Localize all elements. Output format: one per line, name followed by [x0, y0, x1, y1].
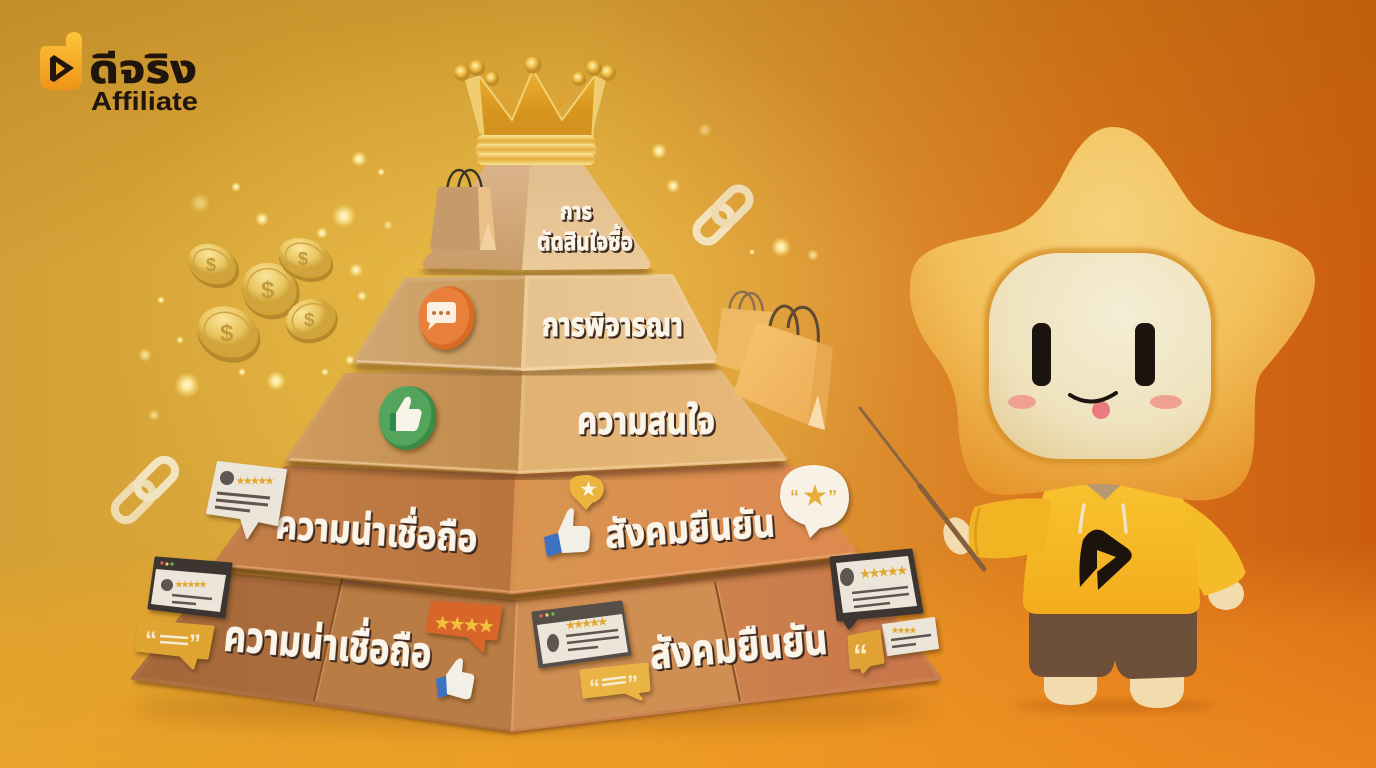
logo icon: [40, 32, 82, 90]
icon: white star speech bubble: [780, 465, 849, 538]
label: การ / ตัดสินใจซื้อ: [537, 198, 633, 256]
pyramid: [133, 163, 940, 732]
icon: yellow star bubble: [570, 475, 604, 510]
icon: gold quote bubble, tier 1 right: [849, 631, 883, 672]
icon: chain link, upper right: [692, 184, 754, 246]
legs: [1044, 665, 1184, 708]
icon: browser review card, tier 1 center: ★★★★★: [565, 617, 608, 632]
label: ความน่าเชื่อถือ (tier 2): ความน่าเชื่อถือ: [274, 497, 479, 561]
icon: gold quote bubble, tier 1 far left: ”: [189, 630, 201, 657]
pointer stick: [860, 408, 984, 569]
icon: review speech card, tier 2 left: ★★★★★: [236, 476, 274, 486]
hoodie torso: [1023, 482, 1200, 614]
icon: white star speech bubble: “: [790, 487, 799, 507]
icon: browser review card, tier 1 far left: [149, 558, 231, 617]
icon: small review card, tier 1 right: ★★★★: [891, 626, 917, 635]
label: การพิจารณา: การพิจารณา: [542, 306, 683, 343]
icon: blue thumbs-up, tier 1: [436, 658, 474, 699]
coin 1: $: [206, 255, 216, 275]
icon: browser review card, tier 1 center: [533, 602, 630, 667]
front bag: [733, 306, 833, 430]
label line 1: การ: [560, 198, 592, 224]
icon: shopping bag on top tier: [430, 170, 496, 250]
icon: gold quote bubble, tier 1 right: “: [853, 639, 868, 672]
coin 4: $: [304, 310, 315, 331]
icon: review card, tier 1 right: [831, 550, 922, 628]
star head: [910, 127, 1315, 500]
icon: blue thumbs-up, tier 2: [544, 508, 590, 557]
eyes: [1032, 323, 1155, 386]
icon: gold quote bubble, tier 1 far left: [136, 621, 213, 668]
crown bands: [475, 135, 597, 165]
icon: green thumbs-up badge: [372, 380, 443, 456]
face: [984, 248, 1216, 464]
tier 3: [288, 372, 785, 476]
left arm with hand: [938, 499, 1050, 559]
logo: ดีจริง Affiliate: [40, 32, 198, 116]
coin 3: $: [298, 249, 308, 269]
label: ความสนใจ: ความสนใจ: [577, 401, 715, 443]
tier 5: top: [423, 163, 650, 274]
coin 3: [273, 231, 339, 289]
coin 5: $: [220, 320, 234, 347]
cheeks: [1008, 395, 1182, 409]
icon: shopping bags, right: [715, 292, 833, 430]
tier 2: [215, 466, 856, 597]
shadow: [1015, 699, 1215, 713]
right arm with hand: [1165, 495, 1244, 610]
crown back spikes: [454, 65, 616, 135]
tongue: [1092, 401, 1110, 419]
tier 4: [355, 276, 717, 373]
collar: [1086, 484, 1122, 500]
icon: chain link, left: [110, 455, 180, 525]
coins: [181, 231, 343, 371]
icon: orange chat badge: [412, 280, 481, 356]
icon: yellow star bubble: ★: [580, 480, 597, 499]
label: ความน่าเชื่อถือ (tier 1): ความน่าเชื่อถือ: [222, 605, 434, 678]
icon: orange star bubble: [427, 602, 501, 651]
chest play logo: [1079, 530, 1132, 590]
coin 4: [281, 293, 343, 349]
label: สังคมยืนยัน (tier 2): สังคมยืนยัน: [604, 502, 776, 557]
mascot: [860, 127, 1315, 713]
icon: gold quote bubble, tier 1 far left: “: [145, 627, 157, 654]
crown front body: [469, 56, 602, 142]
icon: review card, tier 1 right: ★★★★★: [859, 565, 908, 581]
coin 2: [233, 254, 309, 329]
sparkles: [138, 123, 819, 421]
coin 2: $: [261, 277, 275, 304]
icon: white star speech bubble: ★: [803, 483, 827, 510]
coin 5: [190, 298, 268, 371]
crown: [454, 56, 616, 165]
tier 1: base: [133, 562, 940, 732]
icon: orange star bubble: ★★★★: [434, 615, 495, 636]
mouth: [1070, 393, 1116, 402]
icon: gold quote bubble, tier 1 center: ”: [627, 671, 638, 696]
logo sub-label: Affiliate: [91, 86, 198, 116]
icon: browser review card, tier 1 far left: ★★★★★: [175, 580, 207, 589]
coin 1: [181, 236, 246, 296]
icon: gold quote bubble, tier 1 center: [581, 664, 649, 700]
label: สังคมยืนยัน (tier 1): สังคมยืนยัน: [648, 616, 829, 679]
shorts: [1029, 604, 1197, 679]
label line 2: ตัดสินใจซื้อ: [537, 224, 633, 256]
icon: small review card, tier 1 right: [883, 618, 938, 655]
hood strings: [1080, 505, 1126, 532]
back bag: [715, 292, 775, 372]
icon: gold quote bubble, tier 1 center: “: [589, 675, 600, 700]
pyramid shadow on floor: [130, 688, 930, 728]
icon: white star speech bubble: ”: [828, 487, 837, 507]
icon: review speech card, tier 2 left: [207, 462, 286, 538]
logo wordmark: ดีจริง: [89, 48, 197, 92]
